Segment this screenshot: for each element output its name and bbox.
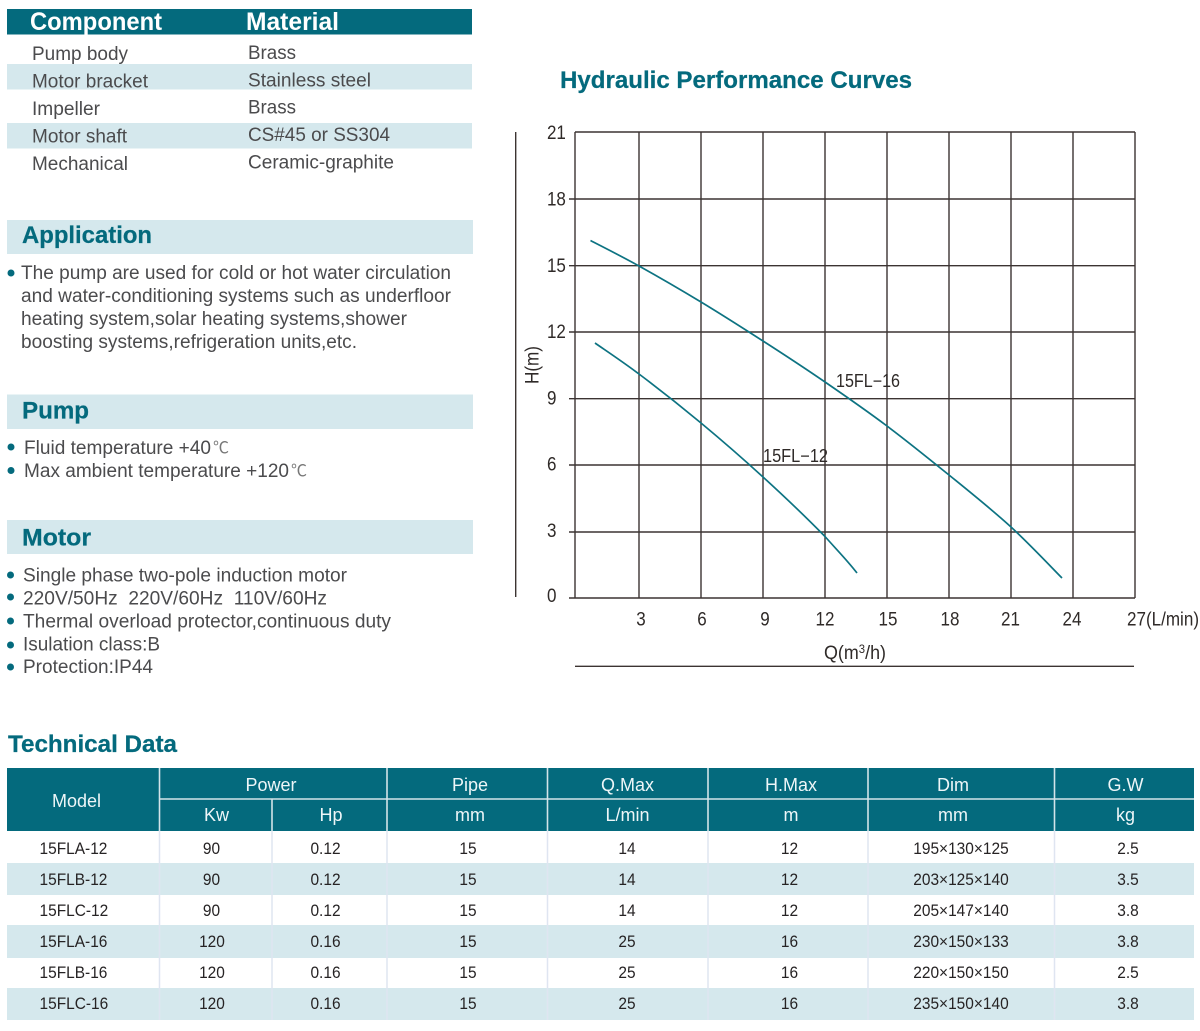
row: 15FLA-16: 230×150×133	[913, 932, 1009, 951]
row: 15FLA-12	[39, 839, 1139, 858]
row: mechanical: Ceramic-graphite	[248, 152, 394, 174]
row: 15FLB-16: 15FLB-16	[39, 963, 107, 982]
panel: application	[7, 220, 473, 353]
row: 15FLA-12: 14	[618, 839, 636, 858]
row: 15FLB-12: 203×125×140	[913, 870, 1009, 889]
row: mechanical	[32, 152, 394, 175]
y axis labels: 12	[547, 321, 566, 342]
motor item: voltage: 220V/50Hz 220V/60Hz 110V/60Hz	[23, 588, 327, 610]
row: 15FLB-16: 2.5	[1117, 963, 1139, 982]
heading: application	[7, 220, 473, 254]
row: 15FLA-16: 16	[781, 932, 798, 951]
application text: and water-conditioning systems such as underfloor	[21, 286, 452, 307]
x axis labels: 12	[816, 609, 834, 630]
row: mechanical: Mechanical	[32, 154, 128, 175]
table header: mm	[938, 805, 968, 825]
row: 15FLC-16: 16	[781, 994, 798, 1013]
motor item: insulation class: Isulation class:B	[23, 634, 160, 656]
row: 15FLA-16: 3.8	[1117, 932, 1139, 951]
row: motor shaft: Motor shaft	[32, 126, 128, 148]
motor item: induction motor: Single phase two-pole induction motor	[23, 566, 348, 586]
row: 15FLB-16: 0.16	[310, 963, 341, 982]
row: 15FLA-12: 12	[781, 839, 798, 858]
x axis labels: 24	[1063, 609, 1081, 630]
row: 15FLA-12: 90	[203, 839, 220, 858]
chart: hydraulic performance curves	[516, 122, 1199, 666]
table header: Pipe	[452, 775, 488, 795]
application text: heating system,solar heating systems,shower	[21, 309, 408, 330]
row: 15FLC-12: 90	[203, 901, 220, 920]
row: 15FLC-16: 15FLC-16	[39, 994, 108, 1013]
row: 15FLC-16: 0.16	[310, 994, 341, 1013]
row: pump body: Brass	[248, 43, 296, 64]
row: 15FLC-12: 15FLC-12	[39, 901, 108, 920]
row: motor bracket: Motor bracket	[32, 72, 149, 92]
table header	[7, 768, 1194, 831]
row: 15FLC-16: 25	[618, 994, 636, 1013]
table header	[7, 8, 472, 36]
row: impeller: Impeller	[32, 99, 101, 120]
row: 15FLA-16	[7, 925, 1194, 958]
row: 15FLA-16: 25	[618, 932, 636, 951]
row: 15FLB-16	[39, 963, 1139, 982]
curve: 15FL-12	[595, 343, 857, 573]
row: 15FLA-16: 15FLA-16	[39, 932, 107, 951]
panel: component and material table	[7, 8, 472, 175]
table header: m	[784, 805, 798, 825]
x axis labels: 18	[941, 609, 959, 630]
y axis labels: 18	[547, 189, 566, 210]
y axis labels: 9	[547, 388, 556, 409]
row: 15FLB-12: 90	[203, 870, 220, 889]
y axis labels: 6	[547, 454, 556, 475]
row: 15FLB-12: 3.5	[1117, 870, 1139, 889]
x axis labels: 15	[879, 609, 897, 630]
row: 15FLC-12	[39, 901, 1139, 920]
x axis labels: 6	[697, 609, 707, 630]
row: pump body	[32, 43, 296, 65]
table header: Q.Max	[601, 775, 654, 795]
row: 15FLA-16: 15	[459, 932, 477, 951]
row: 15FLC-16: 15	[459, 994, 477, 1013]
label: 15FL-12: 15FL−12	[763, 446, 828, 466]
x axis title: 3	[859, 642, 865, 656]
curve: 15FL-16	[590, 240, 1062, 578]
x axis labels: 9	[760, 609, 770, 630]
table header: Kw	[204, 805, 230, 825]
row: 15FLB-12: 14	[618, 870, 636, 889]
table header: Power	[245, 775, 297, 795]
row: 15FLC-12: 205×147×140	[913, 901, 1009, 920]
application text: boosting systems,refrigeration units,etc.	[21, 332, 357, 353]
row: motor bracket: Stainless steel	[248, 70, 371, 92]
row: 15FLC-12: 0.12	[310, 901, 341, 920]
application text	[21, 263, 452, 353]
panel: pump	[7, 394, 473, 482]
row: 15FLA-12: 15FLA-12	[39, 839, 107, 858]
pump item: fluid temperature: ℃	[213, 440, 229, 457]
row: 15FLB-12: 0.12	[310, 870, 341, 889]
row: motor shaft: CS#45 or SS304	[248, 125, 390, 146]
heading: technical data: Technical Data	[8, 731, 178, 758]
y axis title: H(m)	[522, 346, 544, 384]
row: 15FLB-12: 12	[781, 870, 798, 889]
y axis labels: 0	[547, 585, 556, 606]
label: 15FL-16: 15FL−16	[836, 371, 900, 391]
table header: G.W	[1108, 775, 1144, 795]
y axis labels: 21	[547, 122, 566, 143]
row: 15FLA-12: 195×130×125	[913, 839, 1009, 858]
table header: Component	[30, 8, 163, 36]
table header: kg	[1116, 805, 1135, 825]
row: 15FLA-16: 120	[199, 932, 225, 951]
row: 15FLA-16: 0.16	[310, 932, 341, 951]
heading: application: Application	[22, 222, 152, 249]
row: 15FLA-12: 0.12	[310, 839, 341, 858]
row: 15FLB-16: 220×150×150	[913, 963, 1009, 982]
y axis labels: 15	[547, 255, 566, 276]
heading: pump	[7, 394, 473, 429]
y axis labels	[547, 122, 566, 606]
x axis labels: 3	[636, 609, 646, 630]
table header: H.Max	[765, 775, 817, 795]
x axis title: /h)	[865, 643, 886, 664]
motor item: thermal protector: Thermal overload protector,continuous duty	[23, 612, 391, 632]
row: motor bracket	[7, 64, 472, 92]
row: 15FLC-16: 120	[199, 994, 225, 1013]
row: 15FLC-12: 14	[618, 901, 636, 920]
row: pump body: Pump body	[32, 44, 128, 65]
application text: The pump are used for cold or hot water circulation	[21, 263, 451, 284]
table header: Dim	[937, 775, 969, 795]
motor item: protection: Protection:IP44	[23, 657, 153, 678]
row: 15FLB-12: 15FLB-12	[39, 870, 107, 889]
row: 15FLC-16	[7, 988, 1194, 1020]
table: technical data	[7, 768, 1194, 1020]
row: impeller: Brass	[248, 98, 296, 118]
row: 15FLC-16: 3.8	[1117, 994, 1139, 1013]
table header: Hp	[319, 805, 343, 825]
pump item: ambient temperature: Max ambient temperature +120	[24, 461, 289, 482]
y axis labels: 3	[547, 520, 556, 541]
pump item: ambient temperature: ℃	[291, 463, 307, 480]
row: 15FLA-12: 2.5	[1117, 839, 1139, 858]
heading: motor	[7, 520, 473, 554]
row: 15FLC-12: 12	[781, 901, 798, 920]
heading: motor: Motor	[22, 524, 91, 552]
row: motor shaft	[7, 123, 472, 148]
panel: motor	[7, 520, 473, 678]
row: 15FLB-16: 120	[199, 963, 225, 982]
bullet	[8, 270, 14, 276]
row: 15FLA-12: 15	[459, 839, 477, 858]
row: 15FLC-16: 235×150×140	[913, 994, 1009, 1013]
heading: pump: Pump	[22, 398, 89, 424]
pump item: fluid temperature: Fluid temperature +40	[24, 438, 211, 459]
row: 15FLB-12: 15	[459, 870, 477, 889]
table header: L/min	[605, 805, 650, 825]
row: 15FLC-12: 3.8	[1117, 901, 1139, 920]
table header: mm	[455, 805, 485, 825]
table header: Model	[52, 791, 101, 811]
table header: Material	[246, 8, 339, 36]
row: 15FLB-12	[7, 863, 1194, 895]
row: 15FLC-12: 15	[459, 901, 477, 920]
row: 15FLB-16: 15	[459, 963, 477, 982]
x axis title: Q(m	[824, 643, 861, 664]
x axis labels	[636, 609, 1199, 630]
x axis labels: 21	[1001, 609, 1020, 630]
row: 15FLB-16: 25	[618, 963, 636, 982]
row: 15FLB-16: 16	[781, 963, 798, 982]
row: impeller	[32, 98, 296, 120]
heading: hydraulic performance curves: Hydraulic Performance Curves	[560, 67, 912, 94]
